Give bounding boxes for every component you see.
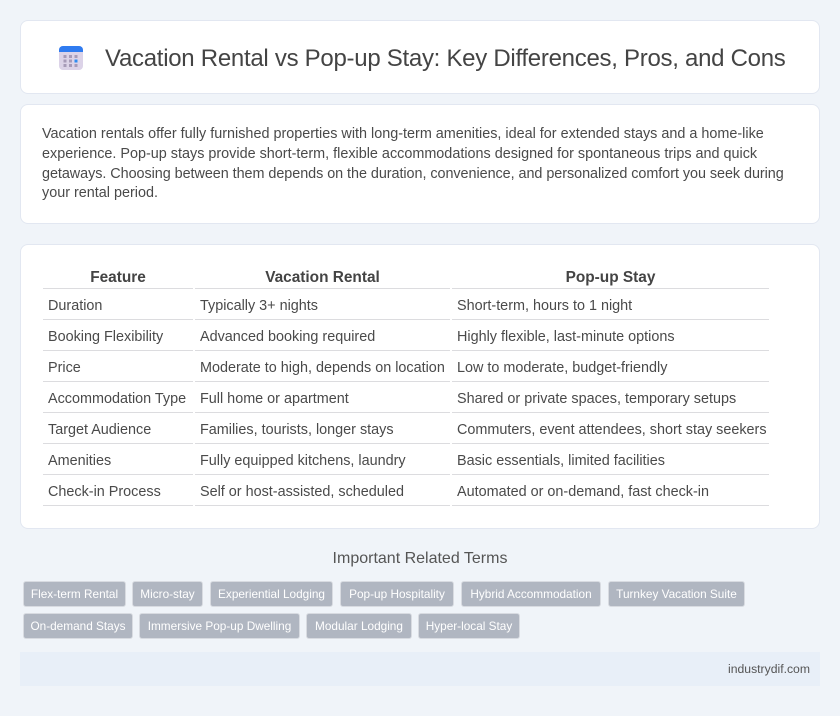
row: price	[48, 360, 668, 376]
row: price: Low to moderate, budget-friendly	[457, 360, 667, 376]
intro paragraph: experience. Pop-up stays provide short-term, flexible accommodations designed for spontaneous trips and quick	[42, 146, 757, 162]
row: duration: Typically 3+ nights	[200, 298, 318, 314]
row: booking flexibility: Highly flexible, last-minute options	[457, 329, 675, 345]
table header row: Pop-up Stay	[566, 269, 655, 286]
row: amenities: Basic essentials, limited facilities	[457, 453, 665, 469]
intro paragraph: your rental period.	[42, 185, 158, 201]
row: duration: Duration	[48, 298, 102, 314]
footer bar	[20, 652, 820, 686]
row: duration: Short-term, hours to 1 night	[457, 298, 632, 314]
table header row	[90, 269, 656, 286]
row: booking flexibility: Advanced booking required	[200, 329, 375, 345]
row: accommodation type: Accommodation Type	[48, 391, 186, 407]
footer credit: industrydif.com	[728, 662, 810, 676]
tag group: related terms: Turnkey Vacation Suite	[616, 587, 737, 601]
row: target audience: Target Audience	[48, 422, 151, 438]
row: accommodation type: Shared or private spaces, temporary setups	[457, 391, 736, 407]
tag group: related terms	[23, 581, 745, 639]
row: amenities	[48, 453, 665, 469]
tag group: related terms: Flex-term Rental	[31, 587, 118, 601]
tag group: related terms: Modular Lodging	[315, 619, 403, 633]
tag group: related terms: Micro-stay	[140, 587, 195, 601]
title: Vacation Rental vs Pop-up Stay: Key Differences, Pros, and Cons	[105, 45, 786, 72]
row: check-in process	[48, 484, 709, 500]
tag group: related terms: Experiential Lodging	[218, 587, 325, 601]
row: accommodation type: Full home or apartment	[200, 391, 349, 407]
row: amenities: Fully equipped kitchens, laundry	[200, 453, 406, 469]
table header row: Feature	[90, 269, 146, 286]
row: amenities: Amenities	[48, 453, 111, 469]
row: check-in process: Check-in Process	[48, 484, 161, 500]
intro paragraph	[42, 126, 784, 201]
heading: important related terms: Important Related Terms	[333, 550, 507, 567]
icon: calendar	[59, 46, 83, 70]
tag group: related terms: Immersive Pop-up Dwelling	[148, 619, 291, 633]
intro paragraph: getaways. Choosing between them depends on the duration, convenience, and personalized comfort you seek during	[42, 166, 784, 182]
panel: intro text	[20, 104, 820, 224]
row: booking flexibility: Booking Flexibility	[48, 329, 163, 345]
table header row: Vacation Rental	[265, 269, 380, 286]
row: duration	[48, 298, 632, 314]
row: booking flexibility	[48, 329, 675, 345]
intro paragraph: Vacation rentals offer fully furnished properties with long-term amenities, ideal for extended stays and a home-like	[42, 126, 764, 142]
tag group: related terms: On-demand Stays	[30, 619, 126, 633]
panel: comparison table	[20, 244, 820, 529]
row: check-in process: Automated or on-demand, fast check-in	[457, 484, 709, 500]
row: check-in process: Self or host-assisted, scheduled	[200, 484, 404, 500]
tag group: related terms: Pop-up Hospitality	[349, 587, 445, 601]
tag group: related terms: Hyper-local Stay	[426, 619, 512, 633]
row: price: Moderate to high, depends on location	[200, 360, 445, 376]
panel: title header	[20, 20, 820, 94]
row: price: Price	[48, 360, 81, 376]
row: target audience	[48, 422, 767, 438]
row: accommodation type	[48, 391, 736, 407]
row: target audience: Families, tourists, longer stays	[200, 422, 394, 438]
tag group: related terms: Hybrid Accommodation	[470, 587, 592, 601]
row: target audience: Commuters, event attendees, short stay seekers	[457, 422, 767, 438]
